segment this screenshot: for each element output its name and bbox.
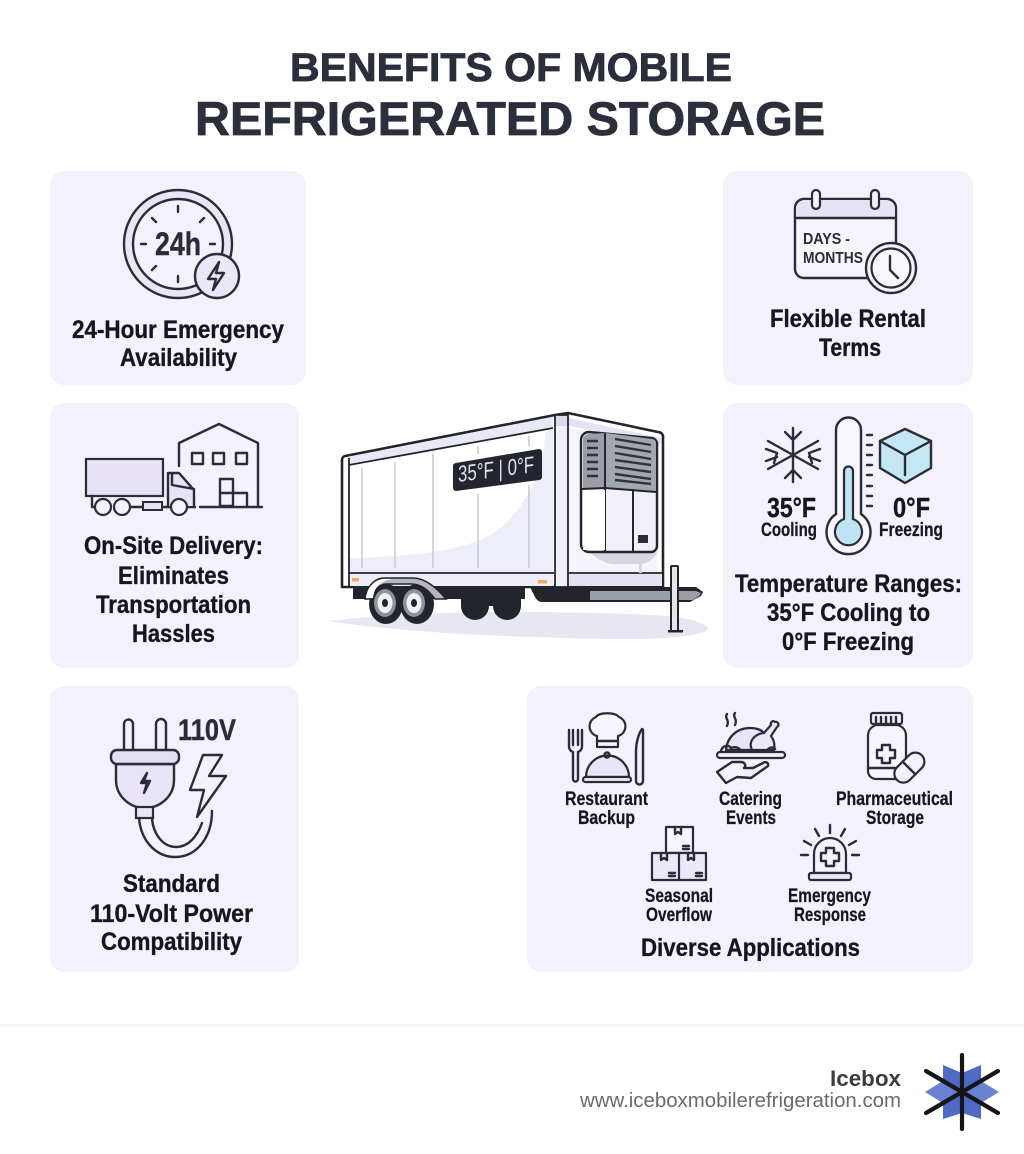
label: catering events: Catering — [719, 789, 782, 810]
temperature labels: Freezing — [879, 520, 943, 541]
label: temperature ranges: 35°F Cooling to — [767, 599, 930, 627]
label: standard 110-volt power compatibility — [90, 870, 253, 956]
label: pharmaceutical storage: Storage — [866, 808, 924, 829]
label: 110V: 110V — [178, 714, 236, 747]
label: temperature ranges — [735, 570, 962, 656]
temperature labels: 0°F — [893, 492, 930, 523]
icon: 24h clock with bolt: 24h — [155, 226, 201, 262]
panel: on-site delivery — [50, 403, 299, 668]
label: emergency response: Response — [794, 905, 866, 926]
temperature labels: 35°F — [767, 492, 816, 523]
panel: 110-volt power — [50, 686, 299, 972]
label: temperature ranges: Temperature Ranges: — [735, 570, 962, 598]
label: seasonal overflow: Seasonal — [645, 886, 713, 907]
footer brand text — [579, 1066, 902, 1112]
footer divider — [0, 1024, 1024, 1026]
icon: catering — [717, 713, 785, 783]
wheels and fender — [365, 578, 446, 624]
title: REFRIGERATED STORAGE — [195, 92, 825, 145]
label: flexible rental terms: Terms — [819, 334, 881, 362]
icon: stacked boxes — [652, 827, 706, 880]
icon: calendar with clock — [795, 190, 916, 293]
refrigeration unit — [581, 432, 657, 573]
icon: 24h clock with bolt — [124, 190, 239, 298]
label: restaurant backup: Backup — [578, 808, 635, 829]
label: restaurant backup: Restaurant — [565, 789, 649, 810]
icon: calendar with clock: DAYS - — [803, 231, 850, 248]
label: temperature ranges: 0°F Freezing — [782, 628, 914, 656]
label: emergency response — [788, 886, 871, 926]
label: on-site delivery: Eliminates — [118, 562, 229, 590]
panel: temperature ranges — [723, 403, 973, 668]
panel: flexible rental terms — [723, 171, 973, 385]
label: seasonal overflow — [645, 886, 713, 926]
label: on-site delivery — [84, 532, 263, 648]
icon: thermometer — [827, 417, 872, 554]
label: seasonal overflow: Overflow — [646, 905, 712, 926]
icon: plug with bolt — [111, 719, 226, 857]
title: BENEFITS OF MOBILE — [290, 46, 732, 90]
label: 24-hour emergency availability — [72, 316, 284, 372]
label: standard 110-volt power compatibility: Standard — [123, 870, 220, 898]
panel: diverse applications — [527, 686, 973, 972]
footer brand text: www.iceboxmobilerefrigeration.com — [579, 1090, 901, 1112]
label: standard 110-volt power compatibility: 110-Volt Power — [90, 900, 253, 928]
icon: emergency siren — [801, 825, 859, 880]
temperature labels: Cooling — [761, 520, 817, 541]
label: diverse applications: Diverse Applications — [641, 934, 860, 962]
label: flexible rental terms — [770, 305, 926, 362]
orange marker lights — [352, 578, 547, 584]
temperature display: 35°F | 0°F — [458, 451, 534, 487]
label: on-site delivery: On-Site Delivery: — [84, 532, 263, 560]
icon: pharmaceutical — [868, 713, 928, 786]
logo: snowflake — [925, 1055, 999, 1129]
label: flexible rental terms: Flexible Rental — [770, 305, 926, 333]
label: emergency response: Emergency — [788, 886, 871, 907]
temperature display — [453, 449, 542, 491]
icon: snowflake — [766, 428, 820, 482]
icon: restaurant — [569, 713, 643, 785]
label: 24-hour emergency availability: Availability — [120, 344, 237, 372]
icon: truck and warehouse — [86, 424, 262, 515]
label: on-site delivery: Hassles — [132, 620, 215, 648]
temperature labels — [761, 492, 943, 541]
icon: ice cube — [880, 429, 931, 483]
illustration: refrigerated trailer — [328, 413, 708, 639]
label: standard 110-volt power compatibility: Compatibility — [101, 928, 242, 956]
label: pharmaceutical storage — [836, 789, 953, 829]
label: on-site delivery: Transportation — [96, 591, 251, 619]
icon: calendar with clock: MONTHS — [803, 250, 863, 267]
label: restaurant backup — [565, 789, 649, 829]
label: 24-hour emergency availability: 24-Hour Emergency — [72, 316, 284, 344]
panel: 24-hour emergency availability — [50, 171, 306, 385]
label: catering events: Events — [726, 808, 776, 829]
title — [195, 46, 825, 145]
undercarriage — [353, 566, 703, 632]
footer brand text: Icebox — [830, 1066, 902, 1091]
label: catering events — [719, 789, 782, 829]
label: pharmaceutical storage: Pharmaceutical — [836, 789, 953, 810]
